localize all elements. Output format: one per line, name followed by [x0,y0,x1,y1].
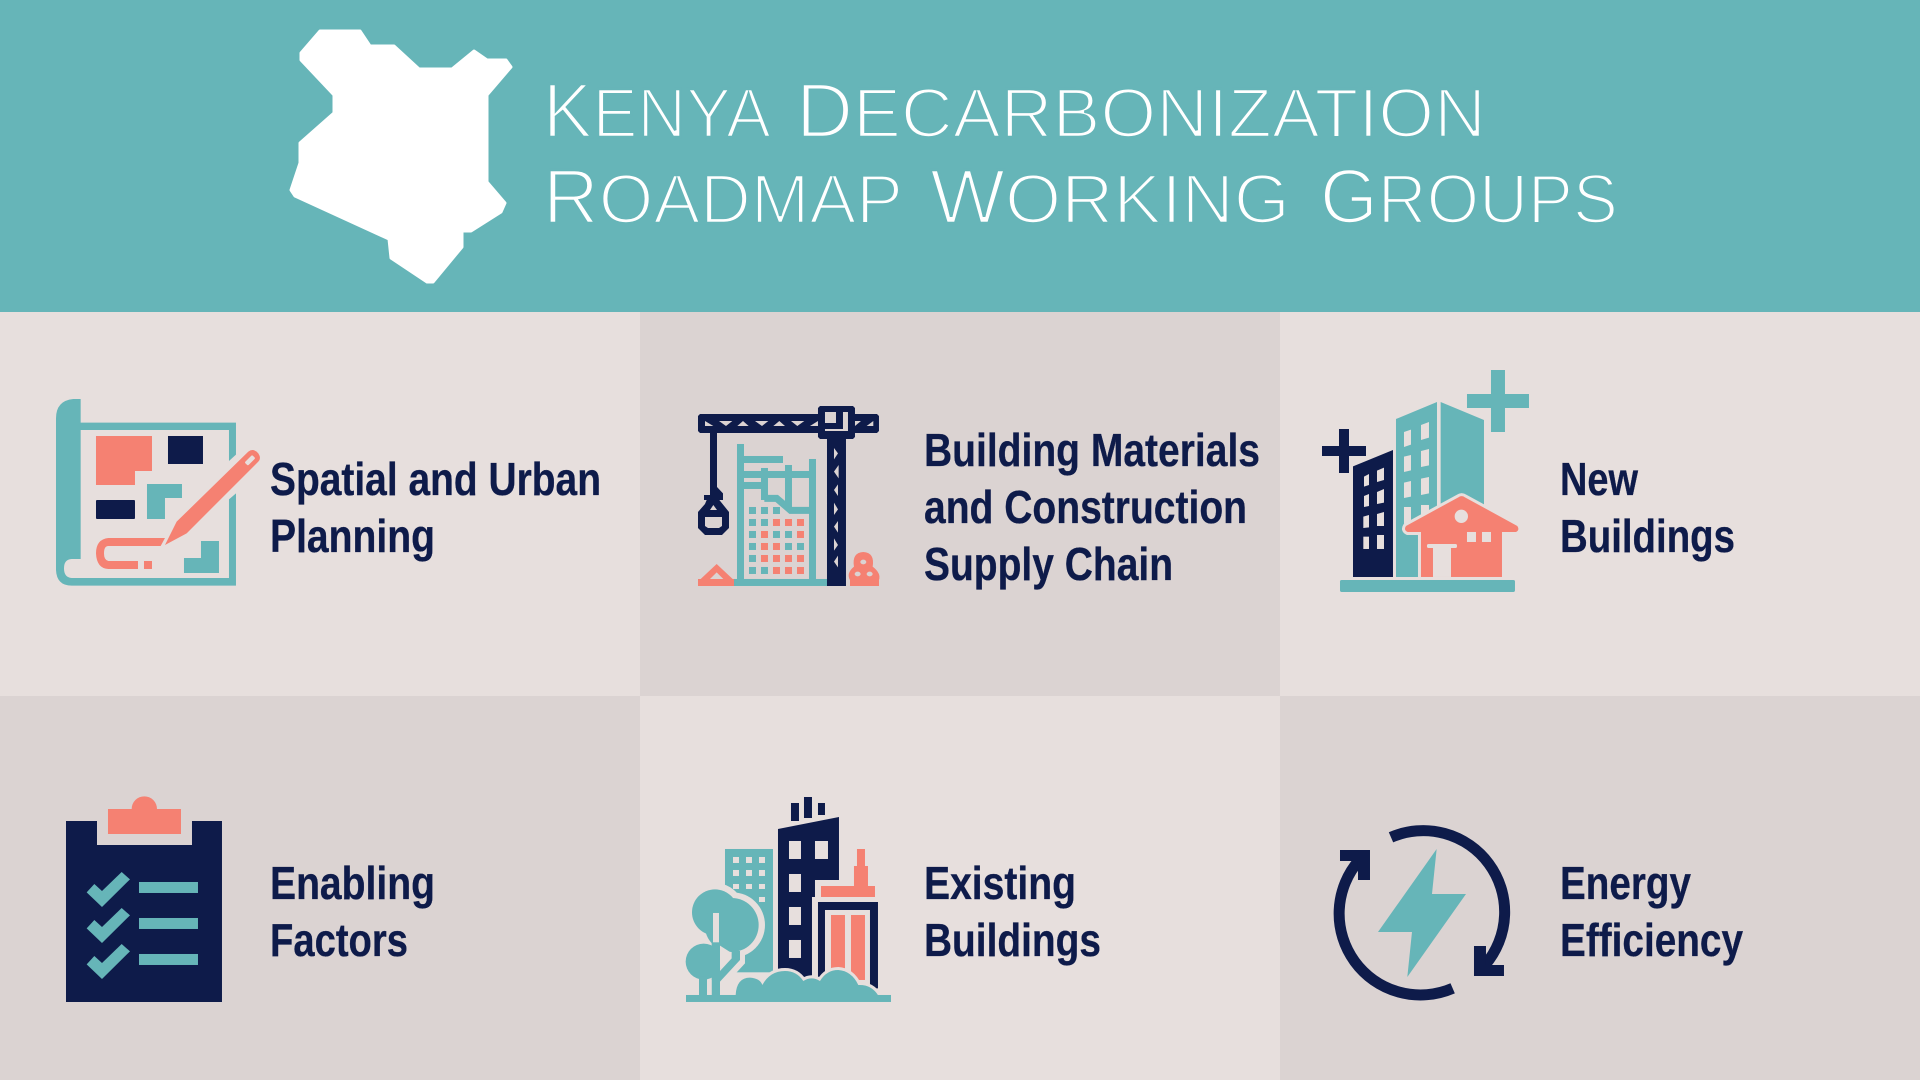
icon: new buildings with plus signs [1322,370,1529,592]
title [543,68,1618,240]
title: KENYA [543,68,771,154]
label: Enabling Factors [270,857,435,966]
title: DECARBONIZATION [796,68,1486,154]
label: Enabling Factors: Enabling [270,857,435,909]
icon: clipboard checklist [66,796,222,1002]
label: Building Materials and Construction Supply Chain: Supply Chain [924,538,1173,590]
label: Building Materials and Construction Supply Chain: and Construction [924,481,1247,533]
label: Spatial and Urban Planning: Spatial and Urban [270,453,601,505]
label: Existing Buildings: Buildings [924,914,1101,966]
title: WORKING [930,154,1290,240]
label: Building Materials and Construction Supply Chain: Building Materials [924,424,1260,476]
header band [0,0,1920,312]
label: Building Materials and Construction Supply Chain [924,424,1260,590]
panel: Building Materials and Construction Supply Chain [640,312,1280,696]
icon: urban plan blueprint and pencil [56,399,260,586]
icon: lightning bolt with circular arrows [1339,831,1505,995]
label: Existing Buildings: Existing [924,857,1076,909]
panel: New Buildings [1280,312,1920,696]
label: Spatial and Urban Planning [270,453,601,562]
panel: Enabling Factors [0,696,640,1080]
label: Energy Efficiency: Efficiency [1560,914,1743,966]
label: New Buildings: New [1560,453,1638,505]
label: Energy Efficiency: Energy [1560,857,1691,909]
label: New Buildings: Buildings [1560,510,1735,562]
panel: Spatial and Urban Planning [0,312,640,696]
icon: tower crane and building [698,406,879,586]
label: Existing Buildings [924,857,1101,966]
panel: Existing Buildings [640,696,1280,1080]
panel: Energy Efficiency [1280,696,1920,1080]
label: Enabling Factors: Factors [270,914,408,966]
label: New Buildings [1560,453,1735,562]
label: Spatial and Urban Planning: Planning [270,510,435,562]
label: Energy Efficiency [1560,857,1743,966]
title: ROADMAP [543,154,903,240]
title: GROUPS [1320,154,1618,240]
icon: existing city buildings and trees [686,797,891,1002]
icon: map of Kenya [291,31,511,282]
